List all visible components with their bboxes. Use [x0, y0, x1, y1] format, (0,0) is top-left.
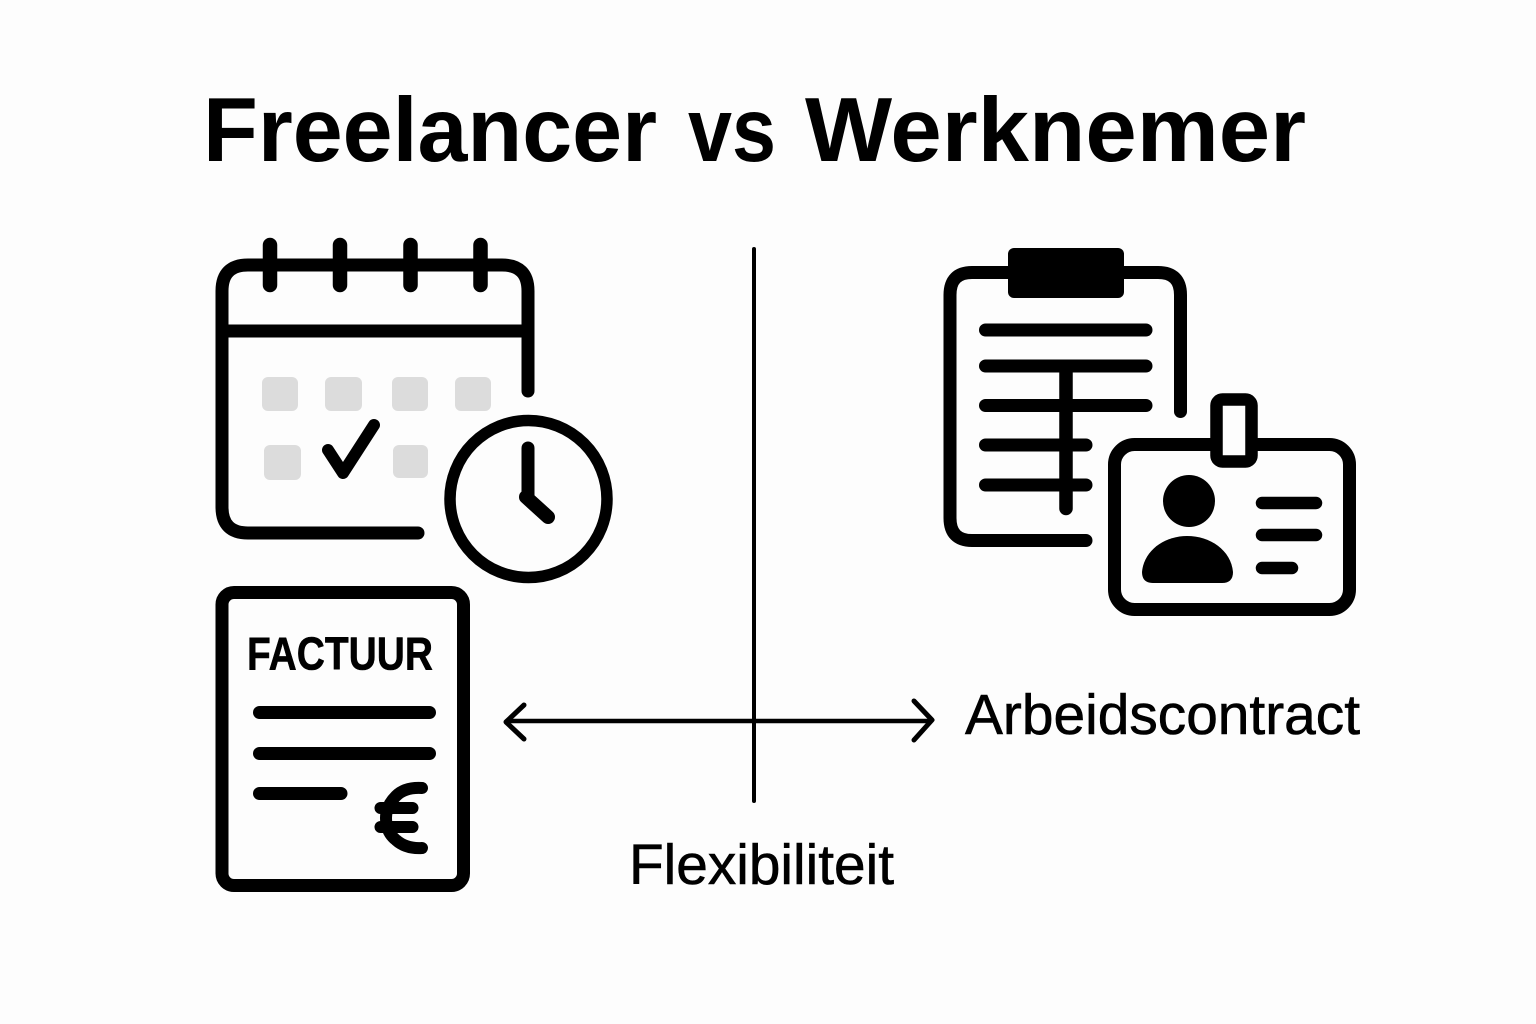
- euro symbol: [380, 788, 422, 848]
- title: Freelancer: [203, 80, 657, 181]
- invoice heading: FACTUUR: [247, 628, 433, 680]
- icon: ID badge: [1114, 400, 1350, 610]
- clipboard clip: [1008, 248, 1124, 298]
- label: Arbeidscontract: Arbeidscontract: [965, 683, 1360, 747]
- invoice lines: [260, 712, 430, 794]
- calendar rings: [270, 245, 480, 285]
- clock: [450, 420, 607, 578]
- vertical axis: [752, 249, 756, 801]
- title: [203, 80, 1306, 181]
- icon: invoice: [222, 592, 464, 886]
- person body: [1142, 536, 1233, 583]
- clock hands: [526, 448, 548, 517]
- badge outline: [1114, 444, 1350, 610]
- icon: clipboard contract: [950, 248, 1180, 540]
- icon: calendar with clock: [222, 245, 607, 578]
- calendar day cells: [262, 377, 491, 480]
- arrow: horizontal double-headed axis: [506, 701, 932, 740]
- invoice outline: [222, 592, 464, 886]
- label: Flexibiliteit: Flexibiliteit: [629, 833, 894, 897]
- calendar header line: [224, 324, 528, 338]
- clipboard vertical line: [1059, 372, 1073, 508]
- title: vs: [688, 80, 776, 181]
- check mark: [328, 425, 374, 473]
- badge clip: [1216, 400, 1252, 462]
- clipboard outline: [950, 272, 1180, 540]
- calendar outline: [222, 265, 528, 533]
- person head: [1163, 475, 1215, 527]
- title: Werknemer: [805, 80, 1306, 181]
- clipboard text lines: [986, 330, 1146, 485]
- badge text lines: [1262, 503, 1316, 568]
